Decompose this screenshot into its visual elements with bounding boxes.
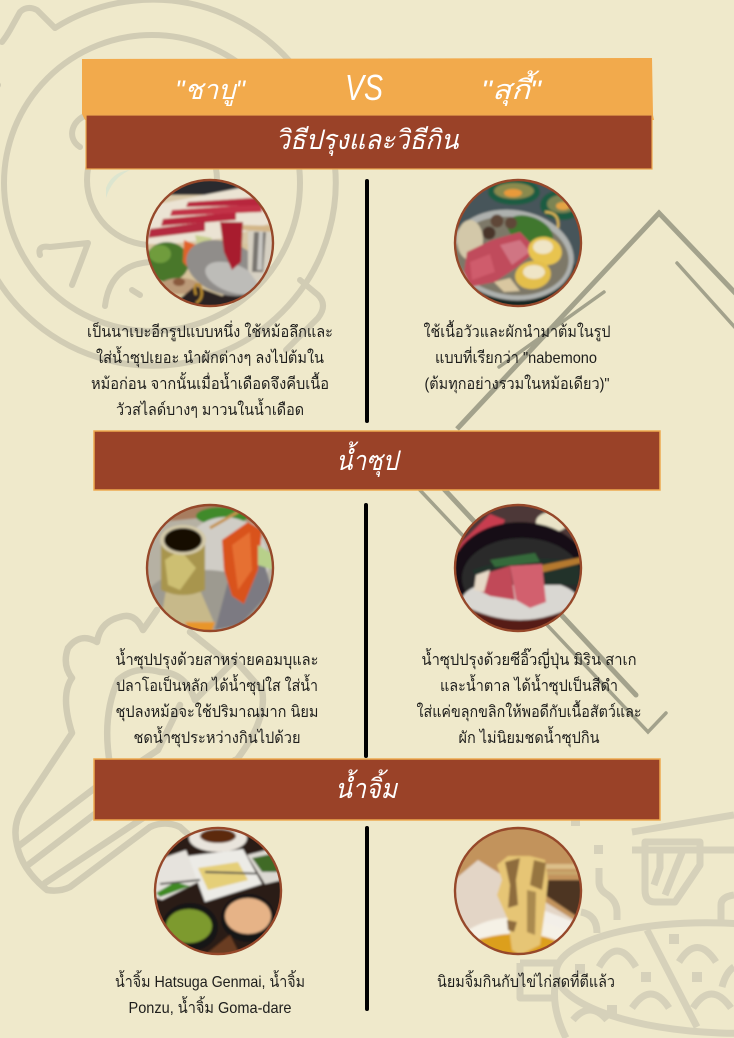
background illustration: hot pot outline	[0, 0, 336, 366]
text: sukiyaki soup	[416, 648, 642, 748]
section header: dipping sauce	[94, 759, 660, 820]
text: sukiyaki cooking method: (ต้มทุกอย่างรวมในหม้อเดียว)"	[424, 374, 610, 394]
text: sukiyaki soup: น้ำซุปปรุงด้วยซีอิ๊วญี่ปุ่น มิริน สาเก	[422, 648, 636, 670]
text: shabu soup: น้ำซุปปรุงด้วยสาหร่ายคอมบุและ	[116, 648, 318, 670]
background illustration: faint leaf accent	[106, 170, 130, 198]
divider: row 3	[365, 826, 369, 1011]
text: shabu cooking method: เป็นนาเบะอีกรูปแบบหนึ่ง ใช้หม้อลึกและ	[87, 320, 333, 342]
background illustration: noodle bowl outline	[520, 815, 734, 1038]
background illustration: small squares	[571, 820, 702, 1015]
text: sukiyaki soup: ใส่แค่ขลุกขลิกให้พอดีกับเนื้อสัตว์และ	[416, 700, 642, 722]
text: shabu dipping sauces: น้ำจิ้ม Hatsuga Genmai, น้ำจิ้ม	[115, 970, 305, 991]
text: shabu cooking method: หม้อก่อน จากนั้นเมื่อน้ำเดือดจึงคีบเนื้อ	[91, 372, 329, 393]
background illustration: lettuce outline	[15, 610, 263, 891]
text: sukiyaki soup: ผัก ไม่นิยมชดน้ำซุปกิน	[458, 726, 600, 748]
text: shabu soup: ปลาโอเป็นหลัก ได้น้ำซุปใส ใส่น้ำ	[116, 674, 318, 696]
text: shabu soup	[116, 648, 318, 748]
heading: suki: "สุกี้"	[481, 70, 543, 107]
text: shabu dipping sauces	[115, 970, 305, 1017]
photo: sukiyaki black pot with beef	[452, 504, 588, 632]
text: shabu dipping sauces: Ponzu, น้ำจิ้ม Goma-dare	[128, 996, 292, 1017]
text: shabu cooking method	[87, 320, 333, 419]
section header: soup	[94, 431, 660, 490]
divider: row 2	[364, 503, 368, 758]
background illustration: mountain lines	[418, 213, 734, 732]
section header: cooking and eating method	[86, 115, 652, 169]
section header: dipping sauce: น้ำจิ้ม	[335, 769, 398, 804]
text: sukiyaki soup: และน้ำตาล ได้น้ำซุปเป็นสีดำ	[440, 674, 618, 696]
heading: vs: VS	[345, 67, 383, 108]
photo: beef dipped in raw egg	[454, 827, 582, 960]
heading: shabu: "ชาบู"	[175, 75, 246, 107]
text: shabu soup: ชุปลงหม้อจะใช้ปริมาณมาก นิยม	[116, 702, 318, 722]
divider: row 1	[365, 179, 369, 423]
text: sukiyaki cooking method	[424, 320, 610, 394]
top banner: shabu vs suki	[82, 58, 654, 120]
text: suki dipping sauce: นิยมจิ้มกินกับไข่ไก่สดที่ตีแล้ว	[437, 970, 615, 991]
text: sukiyaki cooking method: แบบที่เรียกว่า "nabemono	[435, 346, 597, 367]
text: shabu soup: ชดน้ำซุประหว่างกินไปด้วย	[134, 726, 300, 748]
section header: cooking and eating method: วิธีปรุงและวิธีกิน	[276, 125, 460, 157]
text: sukiyaki cooking method: ใช้เนื้อวัวและผักนำมาต้มในรูป	[424, 320, 610, 342]
photo: shabu chimney pot	[145, 504, 274, 632]
text: shabu cooking method: ใส่น้ำซุปเยอะ นำผักต่างๆ ลงไปต้มใน	[96, 346, 324, 368]
photo: shabu pot with sliced beef	[145, 179, 274, 307]
section header: soup: น้ำซุป	[336, 441, 401, 478]
photo: sukiyaki pot	[444, 179, 584, 308]
photo: shabu dipping sauces	[154, 824, 282, 955]
text: shabu cooking method: วัวสไลด์บางๆ มาวนในน้ำเดือด	[116, 398, 304, 419]
